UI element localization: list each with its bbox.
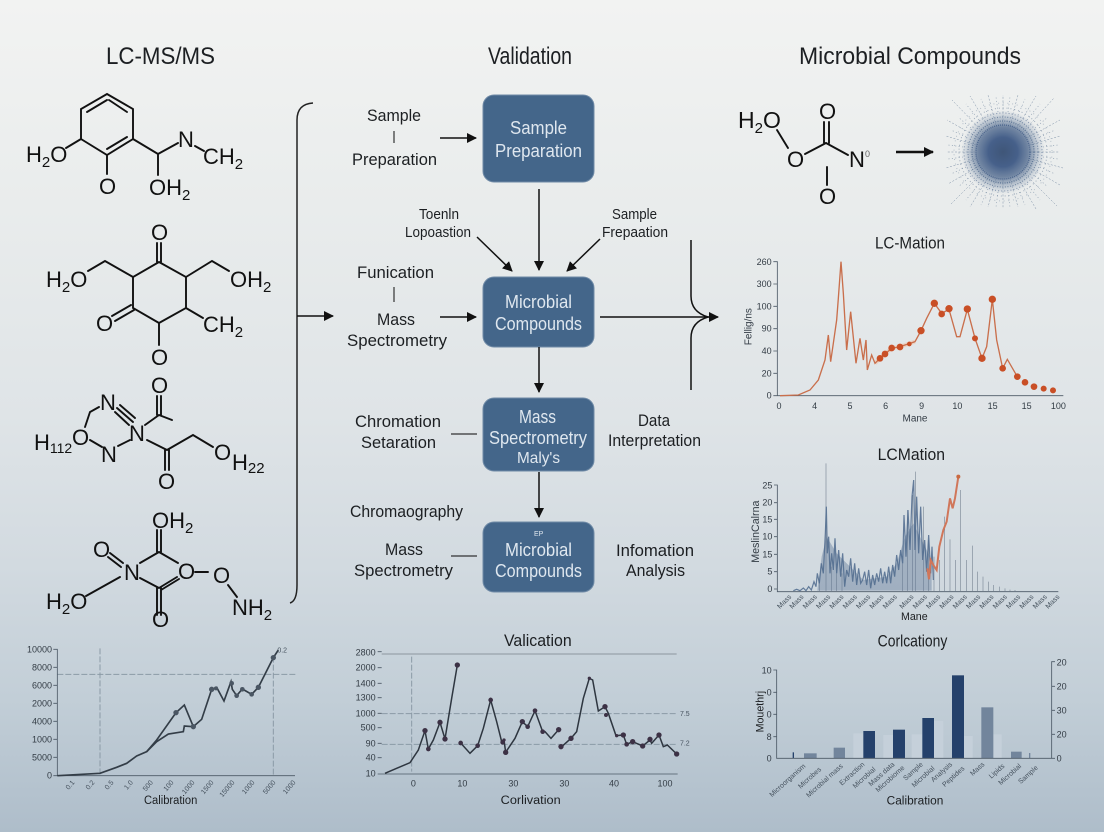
chart: bottom-center Valication line: 500 — [361, 723, 376, 733]
molecule 1: OH — [149, 175, 182, 200]
molecule 3: O — [214, 440, 231, 465]
molecule 2: 2 — [235, 324, 243, 341]
chart: LCMation spectrum: 15 — [762, 549, 772, 559]
flow box: Mass Spectrometry Maly's: Mass — [519, 407, 556, 427]
chart: bottom-center Valication line: 1300 — [356, 693, 376, 703]
molecule 4: O — [70, 589, 87, 614]
chart: LC-Mation line and points: 10 — [952, 401, 962, 411]
chart: LCMation spectrum — [750, 445, 1062, 623]
molecule 3: N — [100, 390, 116, 415]
chart: Corlcationy bars: 0 — [767, 688, 772, 698]
arrow to cluster — [896, 151, 933, 153]
flow box: Sample Preparation: Preparation — [495, 141, 582, 161]
molecule 3: N — [129, 421, 145, 446]
flow box: Sample Preparation — [483, 95, 594, 182]
chart: Corlcationy bars: Lipids — [988, 763, 1007, 780]
chart: bottom-center Valication line: 1400 — [356, 678, 376, 688]
chart: LCMation spectrum: 5 — [767, 567, 772, 577]
flow box: Mass Spectrometry Maly's — [483, 398, 594, 471]
chart: LC-Mation line and points: 20 — [762, 368, 772, 378]
molecule 2: O — [151, 220, 168, 245]
molecule 4: 2 — [62, 601, 70, 618]
chart: Corlcationy bars: Microbial — [998, 763, 1023, 787]
molecule 2: 2 — [263, 279, 271, 296]
chart: Corlcationy bars: Microbial — [911, 765, 937, 789]
side labels: flow steps — [347, 106, 701, 580]
side labels: flow steps: Setaration — [361, 433, 436, 452]
chart: bottom-left Calibration line: 0.2 — [277, 648, 287, 655]
molecule 2: H — [46, 267, 62, 292]
chart: LC-Mation line and points: 15 — [1022, 401, 1032, 411]
chart: LCMation spectrum: Mass — [776, 593, 793, 611]
molecule top right: N — [849, 147, 865, 172]
molecule 2: CH — [203, 312, 235, 337]
chart: LC-Mation line and points: 0 — [767, 391, 772, 401]
icon: microbial particle cluster — [946, 95, 1063, 209]
molecule 4: 2 — [264, 607, 272, 624]
flow box: final Microbial Compounds — [483, 522, 594, 592]
chart: bottom-left Calibration line: 6000 — [32, 680, 52, 690]
chart: bottom-center Valication line: 10 — [457, 779, 467, 789]
molecule 3 — [34, 373, 265, 494]
side labels: flow steps: Toenln — [419, 206, 459, 223]
molecule 4: 2 — [185, 520, 193, 537]
chart: Corlcationy bars: 30 — [1057, 706, 1067, 716]
side labels: flow steps: Lopoastion — [405, 224, 471, 241]
chart: bottom-left Calibration line: 1000 — [282, 779, 298, 796]
chart: LCMation spectrum: Mass — [992, 593, 1009, 611]
chart: bottom-center Valication line: 100 — [657, 779, 672, 789]
chart: Corlcationy bars: 8 — [767, 732, 772, 742]
chart: bottom-left Calibration line: Calibration — [144, 793, 197, 807]
chart: Corlcationy bars: Microbes — [797, 766, 823, 790]
chart: LCMation spectrum: Mass — [842, 593, 859, 611]
molecule 2: O — [151, 345, 168, 370]
chart: Corlcationy bars: 0 — [767, 710, 772, 720]
chart: bottom-center Valication line: 1000 — [356, 708, 376, 718]
chart: LCMation spectrum: Mass — [1045, 593, 1062, 611]
side labels: flow steps: Analysis — [626, 561, 685, 580]
chart: LC-Mation line and points — [744, 233, 1066, 425]
chart: Corlcationy bars: Microbial — [852, 766, 878, 790]
chart: bottom-left Calibration line: 500 — [142, 779, 155, 793]
molecule 4: NH — [232, 595, 264, 620]
chart: LCMation spectrum: Mass — [965, 593, 982, 611]
title: Microbial Compounds: Microbial Compounds — [799, 43, 1021, 70]
molecule 1: 2 — [182, 187, 190, 204]
chart: bottom-left Calibration line: 0.1 — [65, 779, 77, 791]
chart: bottom-center Valication line: 30 — [559, 779, 569, 789]
flow arrows — [394, 131, 718, 556]
molecule 3: H — [232, 450, 248, 475]
chart: LC-Mation line and points: 9 — [919, 401, 924, 411]
chart: bottom-center Valication line: 40 — [609, 779, 619, 789]
chart: LCMation spectrum: Mass — [912, 593, 929, 611]
chart: LCMation spectrum: Mass — [925, 593, 942, 611]
chart: Corlcationy bars: Sample — [1017, 765, 1040, 786]
chart: LC-Mation line and points: 100 — [1051, 401, 1066, 411]
chart: LCMation spectrum: 0 — [767, 584, 772, 594]
molecule 1: CH — [203, 144, 235, 169]
molecule 2: 2 — [62, 279, 70, 296]
chart: LCMation spectrum: Mass — [1005, 593, 1022, 611]
molecule top right: 2 — [755, 120, 763, 137]
chart: LCMation spectrum: Mass — [882, 593, 899, 611]
chart: Corlcationy bars: Microbial mass — [805, 763, 845, 799]
flow box: Microbial Compounds: Compounds — [495, 314, 582, 334]
title: Validation: Validation — [488, 43, 572, 70]
chart: Corlcationy bars: 0 — [1057, 754, 1062, 764]
chart: Corlcationy bars: Calibration — [887, 793, 943, 807]
chart: LCMation spectrum: LCMation — [878, 445, 945, 464]
chart: Corlcationy bars: Corlcationy — [878, 632, 948, 651]
chart: LC-Mation line and points: LC-Mation — [875, 233, 945, 252]
chart: LC-Mation line and points: Fellig/ns — [744, 308, 755, 345]
chart: bottom-left Calibration line: 15000 — [219, 779, 237, 799]
molecule 3: N — [101, 442, 117, 467]
molecule 3: H — [34, 430, 50, 455]
chart: LCMation spectrum: 20 — [762, 498, 772, 508]
chart: bottom-center Valication line: 10 — [366, 768, 376, 778]
chart: bottom-left Calibration line: 5000 — [262, 779, 278, 796]
chart: Corlcationy bars: Mouethrj — [754, 691, 766, 732]
chart: Corlcationy bars: 20 — [1057, 730, 1067, 740]
molecule 1: N — [178, 127, 194, 152]
chart: bottom-left Calibration line: 0 — [47, 771, 52, 781]
chart: LC-Mation line and points: 15 — [988, 401, 998, 411]
chart: LCMation spectrum: 25 — [762, 480, 772, 490]
molecule 4 — [46, 508, 272, 632]
molecule 3: 22 — [248, 460, 265, 477]
chart: bottom-center Valication line: 30 — [508, 779, 518, 789]
chart: LCMation spectrum: Mass — [1019, 593, 1036, 611]
chart: LC-Mation line and points: 100 — [757, 302, 772, 312]
title: LC-MS/MS: LC-MS/MS — [106, 43, 215, 70]
flow box: final Microbial Compounds: EP — [534, 531, 544, 538]
molecule 4: H — [46, 589, 62, 614]
chart: LCMation spectrum: Mass — [855, 593, 872, 611]
flow box: Mass Spectrometry Maly's: Spectrometry — [489, 428, 587, 448]
molecule 3: O — [158, 469, 175, 494]
chart: bottom-left Calibration line: 100 — [163, 779, 176, 793]
chart: Corlcationy bars: Mass data — [868, 761, 896, 788]
chart: bottom-left Calibration line: 5000 — [32, 752, 52, 762]
chart: bottom-left Calibration line: 1000 — [32, 734, 52, 744]
chart: LC-Mation line and points: 40 — [762, 346, 772, 356]
molecule top right — [738, 99, 870, 209]
chart: Corlcationy bars: Peptides — [941, 765, 967, 789]
chart: LCMation spectrum: Mass — [815, 593, 832, 611]
molecule 3: 112 — [50, 440, 72, 456]
molecule 4: OH — [152, 508, 185, 533]
chart: LCMation spectrum: 15 — [762, 514, 772, 524]
chart: LCMation spectrum: Mass — [869, 593, 886, 611]
chart: bottom-center Valication line: 40 — [366, 753, 376, 763]
molecule 4: O — [213, 563, 230, 588]
side labels: flow steps: Funication — [357, 263, 434, 282]
chart: bottom-center Valication line: 2000 — [356, 663, 376, 673]
side labels: flow steps: Preparation — [352, 150, 437, 169]
molecule 2: OH — [230, 267, 263, 292]
chart: bottom-left Calibration line: 10000 — [27, 644, 52, 654]
chart: LCMation spectrum: Mass — [1032, 593, 1049, 611]
molecule top right: H — [738, 107, 755, 133]
chart: Corlcationy bars: 20 — [1057, 658, 1067, 668]
molecule 2: O — [96, 311, 113, 336]
chart: LCMation spectrum: MeslinCalrna — [750, 501, 762, 563]
chart: Corlcationy bars: Microorganism — [769, 763, 807, 799]
side labels: flow steps: Interpretation — [608, 431, 701, 450]
chart: LCMation spectrum: Mass — [979, 593, 996, 611]
side labels: flow steps: Spectrometry — [347, 331, 447, 350]
flow box: Microbial Compounds — [483, 277, 594, 347]
chart: LC-Mation line and points: Mane — [903, 414, 928, 425]
chart: LCMation spectrum: Mass — [802, 593, 819, 611]
chart: bottom-center Valication line: 7.2 — [680, 741, 690, 748]
molecule 1 — [26, 94, 243, 204]
flow box: final Microbial Compounds: Microbial — [505, 540, 572, 560]
chart: bottom-left Calibration line: 1500 — [200, 779, 216, 796]
chart: LC-Mation line and points: 260 — [757, 257, 772, 267]
side labels: flow steps: Chromaography — [350, 502, 463, 521]
molecule top right: 0 — [865, 149, 870, 159]
molecule 1: H — [26, 142, 42, 167]
molecule 3: O — [72, 425, 89, 450]
chart: bottom-center Valication line — [356, 631, 690, 807]
chart: LC-Mation line and points: 300 — [757, 279, 772, 289]
chart: bottom-left Calibration line: 1.0 — [123, 779, 135, 791]
molecule 1: O — [99, 174, 116, 199]
chart: bottom-center Valication line: 7.5 — [680, 711, 690, 718]
chart: LC-Mation line and points: 4 — [812, 401, 817, 411]
chart: LCMation spectrum: Mane — [901, 611, 928, 623]
side labels: flow steps: Mass — [377, 310, 415, 329]
molecule 1: 2 — [235, 156, 243, 173]
chart: bottom-left Calibration line: 0.5 — [104, 779, 116, 791]
chart: bottom-left Calibration line: 0.2 — [85, 779, 97, 791]
chart: bottom-left Calibration line: 8000 — [32, 662, 52, 672]
side labels: flow steps: Sample — [612, 206, 657, 223]
chart: bottom-center Valication line: 90 — [366, 738, 376, 748]
molecule 2: O — [70, 267, 87, 292]
left bracket with arrow — [290, 103, 333, 603]
side labels: flow steps: Mass — [385, 540, 423, 559]
molecule 4: O — [152, 607, 169, 632]
chart: Corlcationy bars: Extraction — [839, 761, 866, 787]
chart: LCMation spectrum: Mass — [952, 593, 969, 611]
chart: Corlcationy bars: 0 — [767, 754, 772, 764]
side labels: flow steps: Spectrometry — [354, 561, 453, 580]
chart: LC-Mation line and points: 5 — [847, 401, 852, 411]
side labels: flow steps: Sample — [367, 106, 421, 125]
molecule top right: O — [763, 107, 781, 133]
chart: bottom-center Valication line: 2800 — [356, 647, 376, 657]
side labels: flow steps: Data — [638, 411, 670, 430]
flow box: Sample Preparation: Sample — [510, 118, 567, 138]
chart: Corlcationy bars: 10 — [762, 665, 772, 675]
chart: LC-Mation line and points: 6 — [883, 401, 888, 411]
chart: bottom-left Calibration line — [27, 644, 298, 807]
molecule 4: O — [93, 537, 110, 562]
chart: bottom-left Calibration line: 1000 — [241, 779, 257, 796]
chart: LCMation spectrum: Mass — [899, 593, 916, 611]
chart: Corlcationy bars: Sample — [902, 761, 925, 782]
chart: bottom-left Calibration line: 1000 — [181, 779, 197, 796]
chart: Corlcationy bars: Analysis — [930, 761, 954, 784]
chart: bottom-center Valication line: Valication — [504, 631, 572, 650]
flow box: Microbial Compounds: Microbial — [505, 292, 572, 312]
molecule 3: O — [151, 373, 168, 398]
chart: LCMation spectrum: Mass — [829, 593, 846, 611]
chart: Corlcationy bars: Microbiome — [875, 765, 906, 794]
side labels: flow steps: Chromation — [355, 412, 441, 431]
chart: LCMation spectrum: Mass — [939, 593, 956, 611]
molecule top right: O — [819, 184, 836, 209]
chart: bottom-center Valication line: Corlivation — [501, 793, 561, 807]
molecule top right: O — [787, 147, 804, 172]
molecule 1: O — [50, 142, 67, 167]
flow box: final Microbial Compounds: Compounds — [495, 561, 582, 581]
flow box: Mass Spectrometry Maly's: Maly's — [517, 450, 560, 467]
chart: Corlcationy bars: 20 — [1057, 682, 1067, 692]
chart: Corlcationy bars — [754, 632, 1067, 807]
molecule top right: O — [819, 99, 836, 124]
side labels: flow steps: Frepaation — [602, 224, 668, 241]
molecule 4: N — [124, 560, 140, 585]
molecule 4: O — [178, 559, 195, 584]
chart: LCMation spectrum: 10 — [762, 532, 772, 542]
chart: bottom-left Calibration line: 4000 — [32, 716, 52, 726]
chart: LCMation spectrum: Mass — [789, 593, 806, 611]
chart: Corlcationy bars: Mass — [969, 761, 987, 778]
molecule 1: 2 — [42, 154, 50, 171]
chart: bottom-left Calibration line: 2000 — [32, 698, 52, 708]
chart: bottom-center Valication line: 0 — [411, 779, 416, 789]
side labels: flow steps: Infomation — [616, 541, 694, 560]
molecule 2 — [46, 220, 271, 370]
chart: LC-Mation line and points: 0 — [776, 401, 781, 411]
chart: LC-Mation line and points: 90 — [762, 324, 772, 334]
